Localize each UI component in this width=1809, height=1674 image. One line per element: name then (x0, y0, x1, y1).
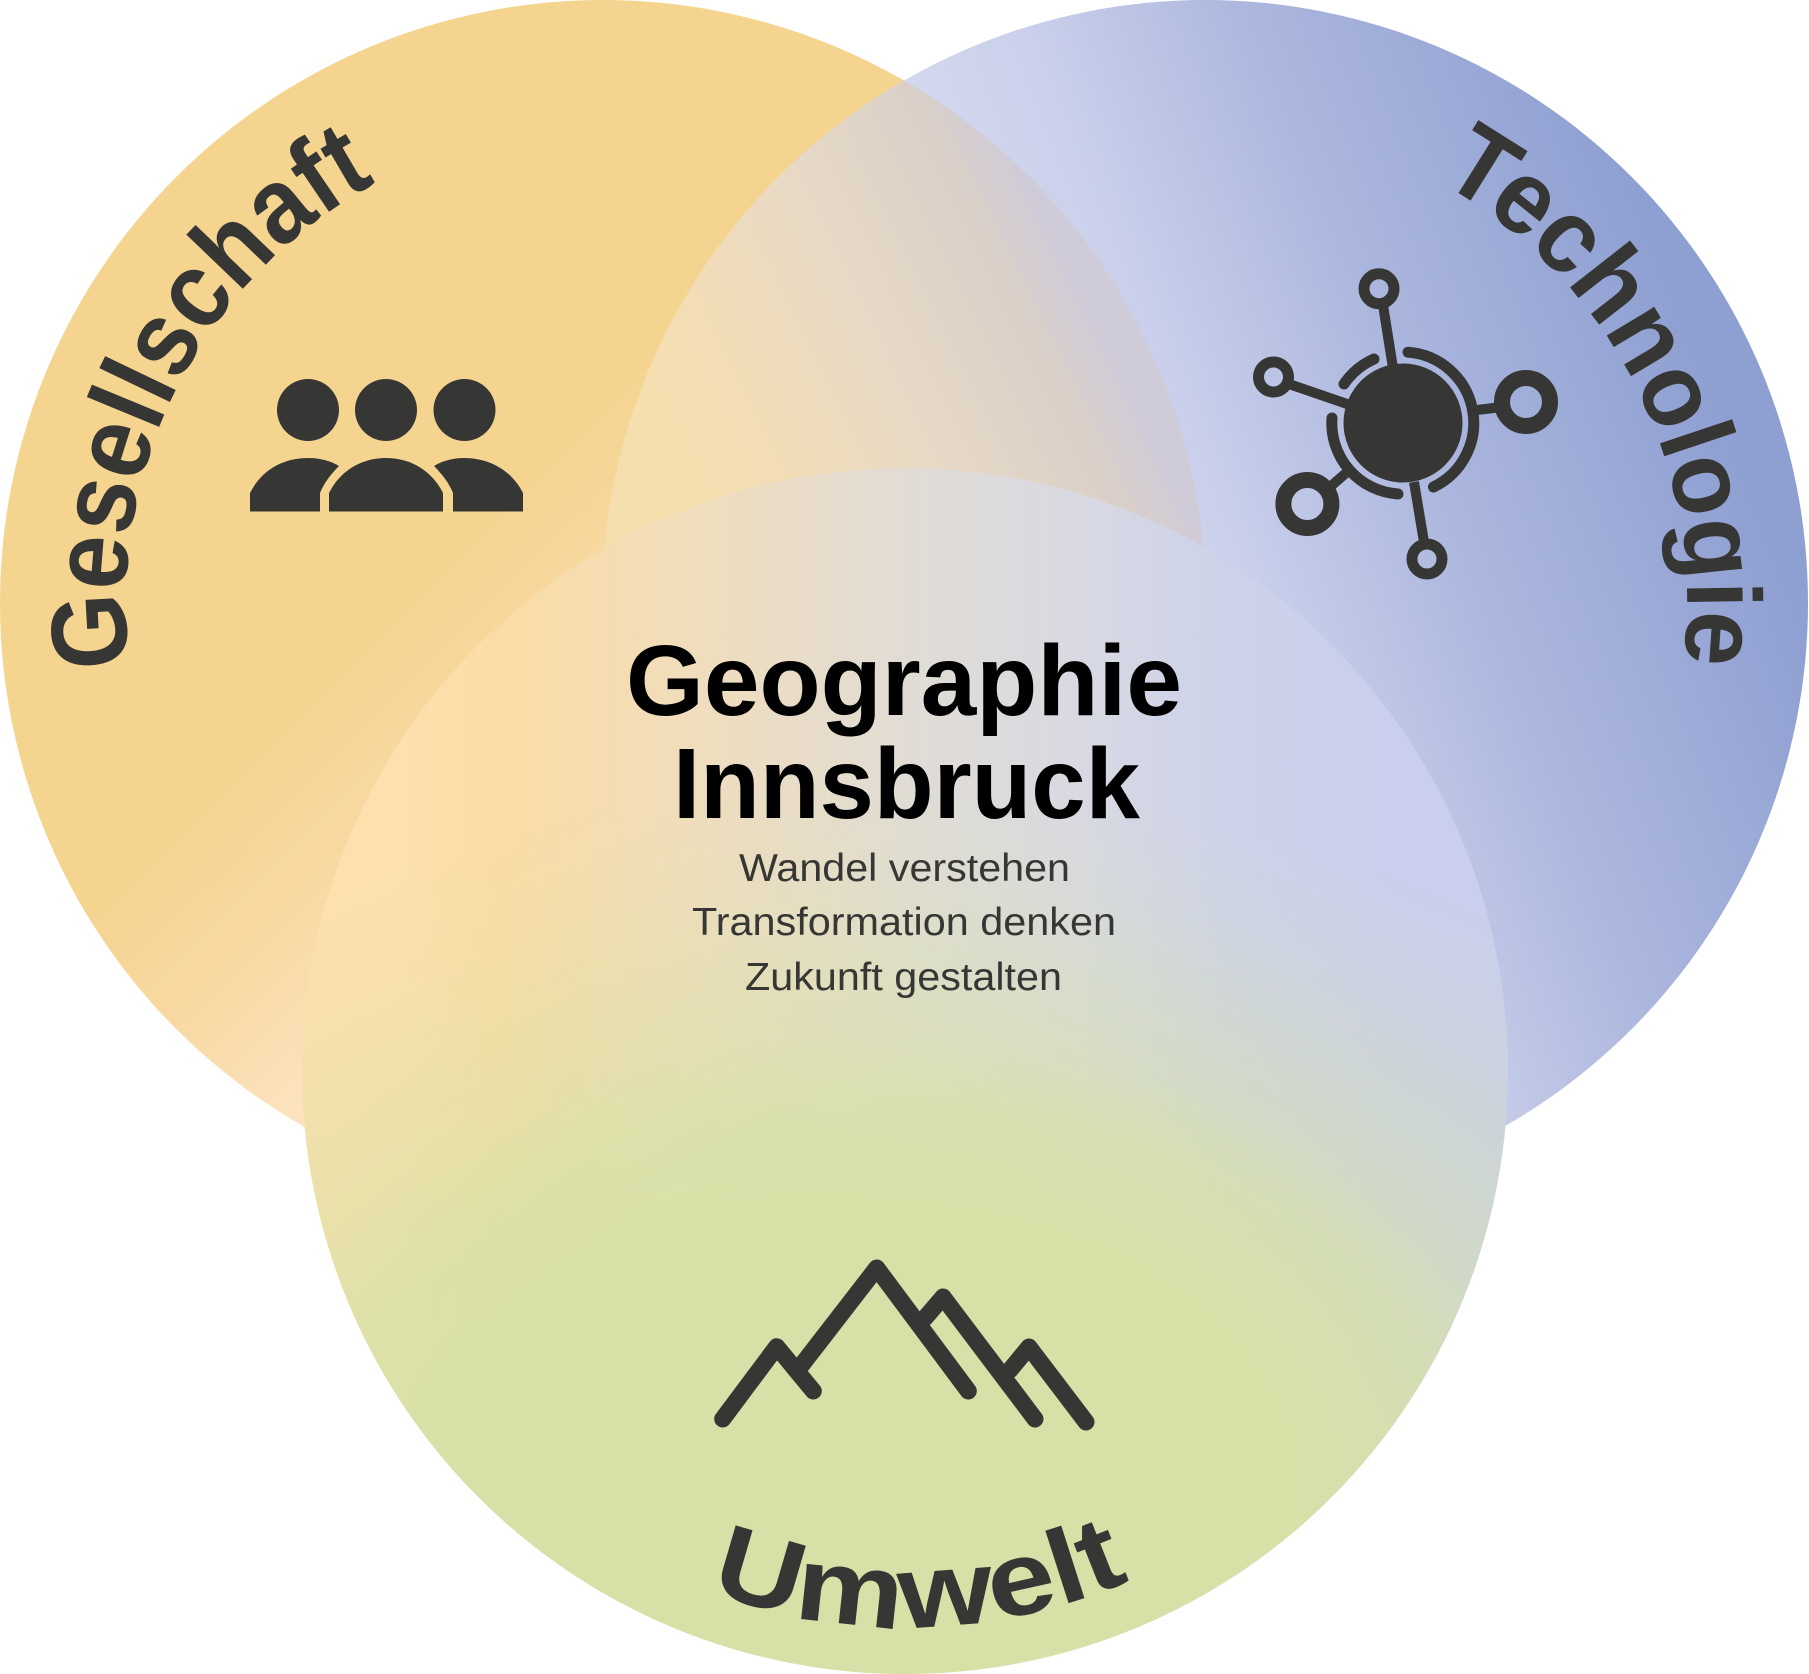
title (626, 625, 1182, 840)
overlap: Gesellschaft and Technologie (602, 80, 1206, 1126)
tagline: Wandel verstehen (739, 847, 1070, 890)
tagline: Zukunft gestalten (745, 956, 1062, 999)
tagline: Transformation denken (692, 901, 1116, 944)
circle: Gesellschaft (0, 0, 1206, 1206)
heading: Technologie: Technologie (1458, 120, 1764, 662)
icon: mountains (723, 1268, 1086, 1422)
icon: network hub (1258, 274, 1550, 574)
icon: people (250, 379, 523, 512)
heading: Gesellschaft: Gesellschaft (51, 127, 375, 666)
circle: Umwelt (302, 468, 1508, 1674)
title: Geographie (626, 625, 1182, 737)
title: Innsbruck (673, 728, 1140, 840)
heading: Umwelt: Umwelt (722, 1522, 1129, 1629)
tagline (692, 847, 1116, 999)
circle: Technologie (602, 0, 1808, 1206)
